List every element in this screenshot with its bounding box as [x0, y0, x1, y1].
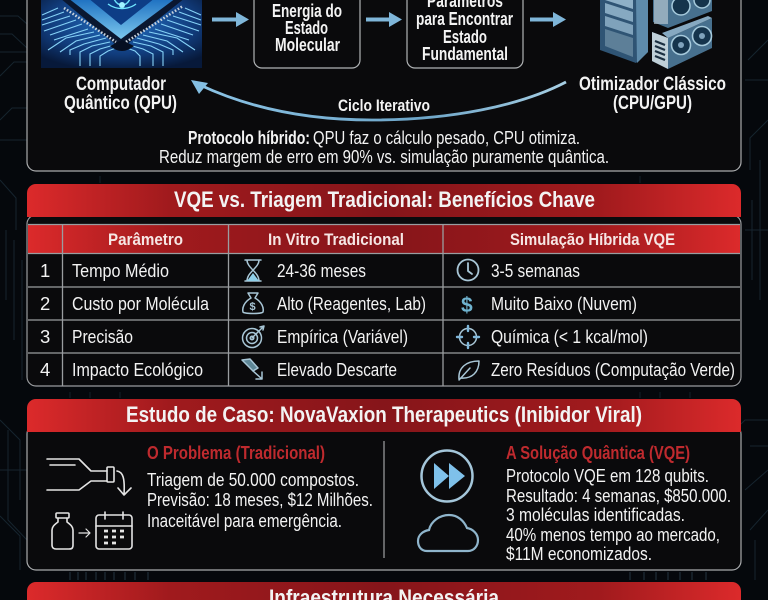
row 3: precision: 3 — [40, 326, 50, 347]
box: parameters — [407, 0, 523, 68]
box: molecular state energy: Estado — [285, 18, 328, 38]
box: molecular state energy — [254, 0, 360, 68]
row 1: average time: Tempo Médio — [72, 260, 169, 281]
icon: classical server and GPUs — [600, 0, 712, 69]
text: the problem — [147, 442, 373, 531]
row 4: ecological impact: Elevado Descarte — [277, 359, 397, 380]
heading: required infrastructure — [27, 582, 741, 600]
heading: case study — [27, 399, 741, 432]
icon: leaf — [459, 361, 479, 380]
icon: dollar sign: $ — [461, 294, 473, 317]
text: the quantum solution — [506, 442, 731, 564]
table header row: In Vitro Tradicional — [268, 230, 404, 249]
icon: vial to calendar — [52, 512, 132, 549]
icon: tipped bottle — [47, 459, 131, 495]
row 3: precision: Empírica (Variável) — [277, 326, 408, 347]
text: the quantum solution: 3 moléculas identificadas. — [506, 505, 685, 525]
row 2: cost per molecule: Alto (Reagentes, Lab) — [277, 293, 426, 314]
text: the problem: Triagem de 50.000 compostos. — [147, 470, 359, 490]
row 4: ecological impact — [40, 359, 735, 380]
text: the quantum solution: $11M economizados. — [506, 544, 652, 564]
icon: target — [242, 326, 264, 348]
text: hybrid protocol note — [159, 127, 609, 167]
text: hybrid protocol note: Protocolo híbrido: — [188, 127, 310, 148]
row 1: average time: 1 — [40, 260, 50, 281]
icon: money bag — [243, 293, 263, 314]
icon: fast forward — [422, 450, 472, 502]
box: molecular state energy: Energia do — [272, 1, 342, 21]
text: the quantum solution: A Solução Quântica (VQE) — [506, 442, 690, 463]
table header row: Parâmetro — [108, 230, 183, 249]
row 1: average time: 24-36 meses — [277, 260, 366, 281]
row 3: precision — [40, 326, 648, 348]
box: parameters: Fundamental — [422, 44, 508, 64]
arrow: iterative cycle — [191, 80, 566, 120]
table header row — [28, 225, 740, 253]
arrow: energy to parameters — [366, 12, 402, 27]
row 4: ecological impact: 4 — [40, 359, 50, 380]
label: quantum computer — [64, 74, 177, 114]
row 3: precision: Precisão — [72, 326, 133, 347]
row 2: cost per molecule: Muito Baixo (Nuvem) — [491, 293, 637, 314]
panel: case study — [27, 399, 741, 570]
text: the quantum solution: Protocolo VQE em 128 qubits. — [506, 466, 709, 486]
icon: discarded waste — [242, 359, 262, 379]
row 2: cost per molecule: 2 — [40, 293, 50, 314]
box: parameters: Estado — [443, 27, 487, 47]
row 4: ecological impact: Impacto Ecológico — [72, 359, 203, 380]
icon: quantum processor chip — [41, 0, 202, 68]
arrow: parameters to optimizer — [530, 12, 566, 27]
arrow: QPU to energy — [212, 12, 249, 27]
row 3: precision: Química (< 1 kcal/mol) — [491, 326, 648, 347]
row 1: average time: 3-5 semanas — [491, 260, 580, 281]
table header row: Simulação Híbrida VQE — [510, 230, 675, 249]
panel: hybrid VQE cycle — [27, 0, 741, 171]
text: the problem: Inaceitável para emergência. — [147, 511, 342, 531]
row 2: cost per molecule: Custo por Molécula — [72, 293, 210, 314]
icon: hourglass — [245, 260, 261, 281]
text: hybrid protocol note: QPU faz o cálculo pesado, CPU otimiza. — [313, 127, 580, 148]
text: the quantum solution: Resultado: 4 semanas, $850.000. — [506, 486, 731, 506]
row 1: average time — [40, 260, 580, 281]
icon: clock — [458, 260, 478, 280]
box: parameters: para Encontrar — [416, 9, 513, 29]
label: classical optimizer — [579, 74, 726, 114]
panel: comparison table — [27, 184, 741, 386]
label: quantum computer: Quântico (QPU) — [64, 93, 177, 114]
heading: comparison: VQE vs. Triagem Tradicional: Benefícios Chave — [174, 187, 595, 212]
icon: cloud — [418, 515, 478, 551]
icon: money bag: $ — [250, 301, 256, 313]
label: iterative cycle: Ciclo Iterativo — [338, 96, 430, 115]
heading: case study: Estudo de Caso: NovaVaxion Therapeutics (Inibidor Viral) — [126, 402, 642, 427]
text: the problem: Previsão: 18 meses, $12 Milhões. — [147, 490, 373, 510]
icon: crosshair — [457, 326, 479, 348]
label: classical optimizer: Otimizador Clássico — [579, 74, 726, 95]
box: molecular state energy: Molecular — [275, 35, 340, 55]
heading: comparison — [27, 184, 741, 217]
text: the quantum solution: 40% menos tempo ao mercado, — [506, 525, 720, 545]
text: the problem: O Problema (Tradicional) — [147, 442, 325, 463]
label: quantum computer: Computador — [76, 74, 166, 95]
text: hybrid protocol note: Reduz margem de erro em 90% vs. simulação puramente quântica. — [159, 146, 609, 167]
row 2: cost per molecule — [40, 293, 637, 317]
label: classical optimizer: (CPU/GPU) — [613, 93, 692, 114]
